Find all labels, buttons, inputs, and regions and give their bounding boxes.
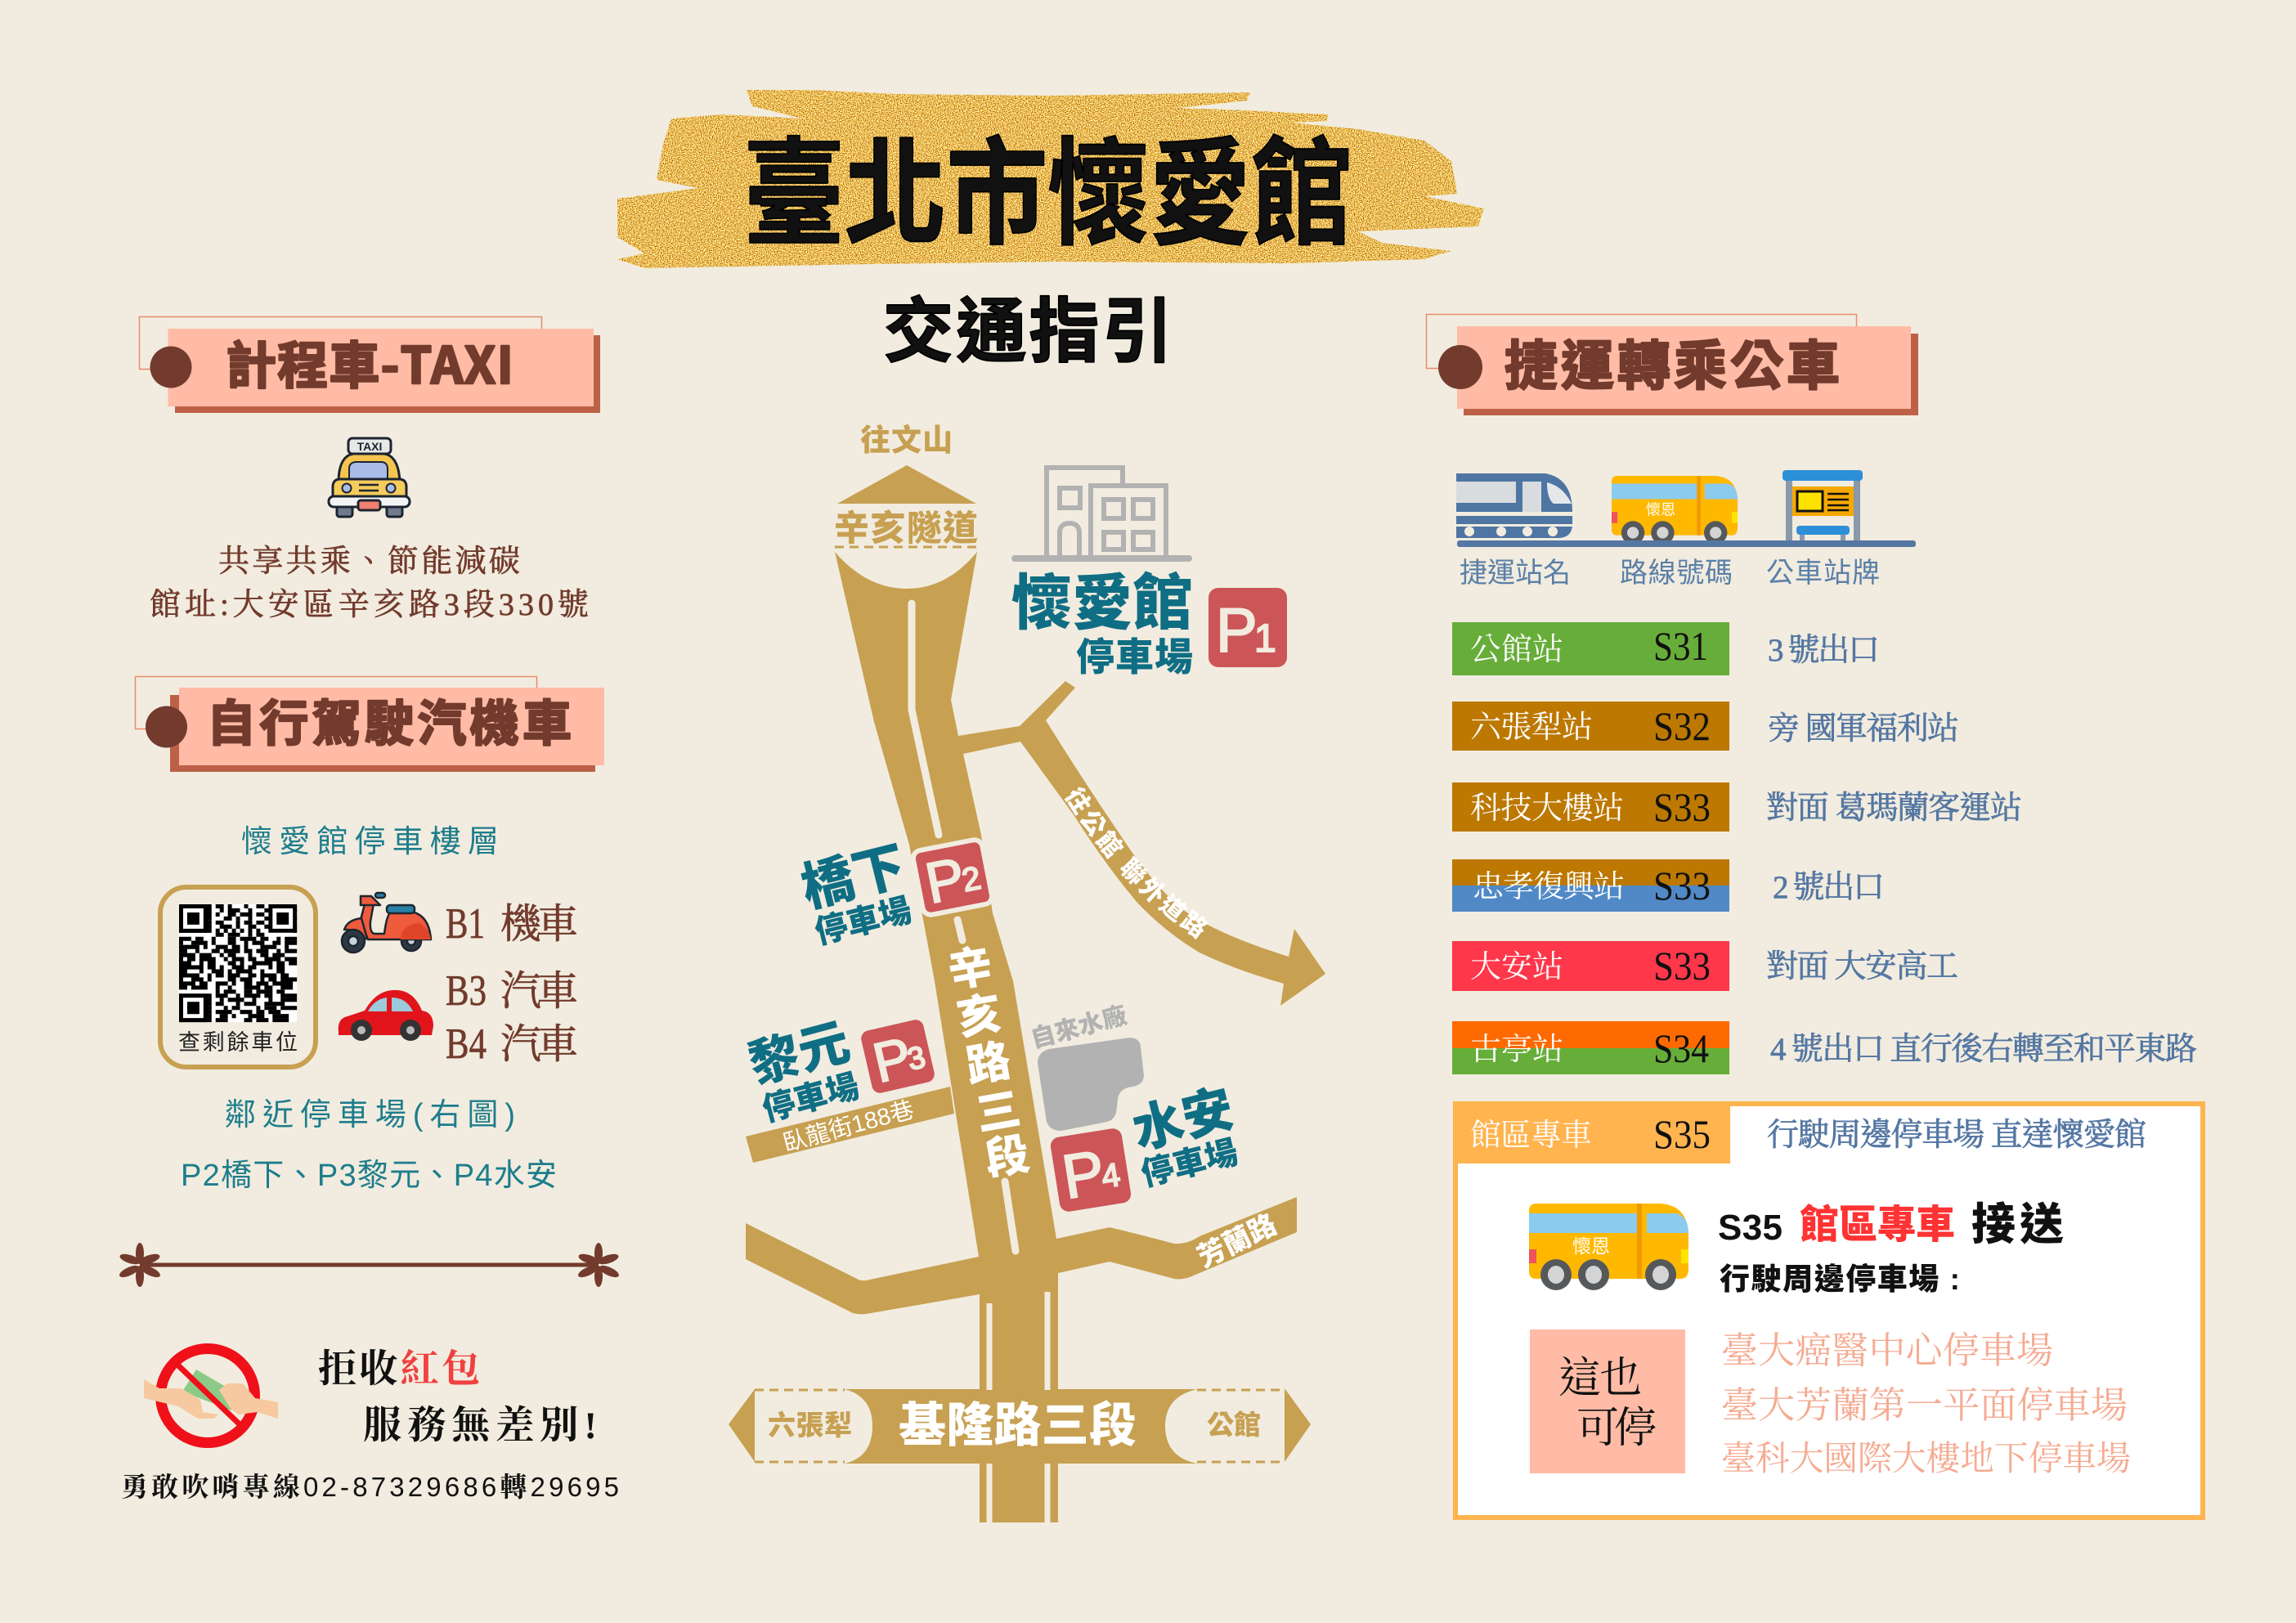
floor labels: 汽車 — [500, 1021, 578, 1067]
title block — [617, 90, 1484, 376]
icon: car — [339, 990, 433, 1041]
icon: bus stop — [1783, 470, 1863, 543]
road labels: 基隆路三段 — [899, 1399, 1137, 1452]
floor labels: B4 — [446, 1020, 487, 1068]
taxi text: 共享共乘、節能減碳 — [218, 545, 520, 579]
parking label: P1: 停車場 — [1076, 635, 1193, 679]
shuttle heading: S35 — [1718, 1208, 1783, 1248]
road labels: 段 — [981, 1129, 1034, 1186]
heading: taxi: 計程車-TAXI — [226, 325, 513, 398]
column labels — [1460, 558, 1880, 589]
icon: building — [1015, 468, 1189, 558]
row: Technology Building: 科技大樓站 — [1470, 791, 1624, 826]
row: Daan: S33 — [1653, 943, 1711, 989]
row: Liuzhangli: 六張犁站 — [1470, 711, 1593, 745]
panel: taxi — [139, 317, 600, 622]
row: Liuzhangli: 旁 國軍福利站 — [1768, 711, 1959, 746]
parking lot list: 臺大芳蘭第一平面停車場 — [1721, 1385, 2128, 1426]
column labels: 捷運站名 — [1460, 558, 1571, 589]
heading: self driving: 自行駕駛汽機車 — [207, 684, 572, 755]
row: Gongguan: 公館站 — [1470, 633, 1563, 667]
panel: S35 shuttle — [1453, 1101, 2203, 1518]
row: Gongguan — [1452, 622, 1880, 675]
parking label: P2: P — [921, 845, 970, 916]
floor labels: B3 — [446, 967, 487, 1015]
row: Guting: S34 — [1653, 1025, 1709, 1071]
road labels: 臥龍街188巷 — [780, 1096, 917, 1157]
shuttle heading: 館區專車 — [1800, 1203, 1955, 1247]
also parking box: 這也 — [1558, 1356, 1642, 1402]
icon: no bribery — [144, 1349, 278, 1442]
shuttle header row: 館區專車 — [1470, 1119, 1592, 1153]
row: Technology Building: 對面 葛瑪蘭客運站 — [1766, 791, 2022, 826]
nearby parking text: P2橋下、P3黎元、P4水安 — [181, 1159, 557, 1193]
floor labels: 機車 — [500, 901, 578, 947]
icon: train — [1456, 473, 1572, 538]
road: main roads — [729, 552, 1325, 1522]
parking label: P1: P — [1216, 596, 1258, 666]
parking label: P4 and water plant — [1028, 1001, 1241, 1213]
whistleblower hotline: 勇敢吹哨專線02-87329686轉29695 — [121, 1472, 619, 1503]
road labels: 亥 — [953, 989, 1006, 1045]
parking label: P2: 2 — [959, 860, 984, 899]
parking label: P4 and water plant: 停車場 — [1137, 1135, 1241, 1193]
road labels — [768, 787, 1281, 1452]
heading: taxi — [139, 317, 600, 413]
icon: taxi — [329, 438, 410, 517]
heading: MRT transfer: 捷運轉乘公車 — [1505, 323, 1840, 400]
road labels: 公館 — [1207, 1410, 1261, 1440]
shuttle header row — [1453, 1101, 2146, 1163]
road labels: 六張犁 — [768, 1410, 852, 1441]
floor labels — [446, 900, 578, 1068]
parking label: P1: 1 — [1254, 617, 1276, 661]
row: Zhongxiao Fuxing: 2 號出口 — [1773, 870, 1885, 905]
slogan — [318, 1348, 597, 1447]
slogan: 服務無差別! — [363, 1405, 597, 1447]
icon: bus: 懷恩 — [1646, 501, 1675, 518]
map — [729, 423, 1325, 1522]
road labels: 路 — [962, 1036, 1015, 1092]
QR code card — [160, 887, 316, 1067]
icon: scooter — [342, 893, 431, 953]
row: Daan — [1452, 941, 1958, 991]
parking label: P1: 懷愛館 — [1011, 569, 1193, 637]
parking label: P2 — [796, 836, 993, 951]
title: 臺北市懷愛館 — [743, 101, 1352, 269]
row: Zhongxiao Fuxing: 忠孝復興站 — [1473, 870, 1625, 904]
parking label: P1 — [1011, 569, 1287, 679]
parking label: P4 and water plant: 水安 — [1128, 1081, 1240, 1160]
road labels: 往公館 聯外道路 — [1065, 787, 1209, 939]
panel: no red envelopes — [121, 1348, 619, 1503]
parking label: P2: 停車場 — [811, 893, 915, 951]
shuttle header row: S35 — [1653, 1111, 1711, 1157]
parking floors heading: 懷愛館停車樓層 — [241, 825, 499, 859]
gold brush stroke — [617, 90, 1484, 268]
parking lot list: 臺大癌醫中心停車場 — [1721, 1330, 2053, 1371]
ground line — [1457, 540, 1916, 547]
parking label: P3 — [743, 1014, 936, 1128]
road labels: 三 — [972, 1084, 1025, 1141]
parking label: P4 and water plant: P — [1057, 1137, 1110, 1213]
row: Technology Building — [1452, 782, 2022, 832]
road labels: 辛 — [944, 941, 997, 998]
floor labels: B1 — [446, 900, 485, 948]
row: Gongguan: 3 號出口 — [1768, 633, 1880, 668]
parking label: P3: 黎元 — [743, 1014, 856, 1095]
row: Guting: 古亭站 — [1470, 1033, 1563, 1067]
parking label: P4 and water plant: 4 — [1099, 1157, 1123, 1195]
parking lot list — [1721, 1330, 2131, 1478]
row: Liuzhangli: S32 — [1653, 703, 1711, 749]
taxi text: 館址:大安區辛亥路3段330號 — [150, 588, 589, 622]
floor labels: 汽車 — [500, 968, 578, 1014]
shuttle heading: 行駛周邊停車場 : — [1720, 1262, 1960, 1296]
heading: MRT transfer — [1426, 314, 1918, 415]
shuttle header row: 行駛周邊停車場 直達懷愛館 — [1767, 1118, 2146, 1153]
row: Guting — [1452, 1021, 2197, 1074]
column labels: 公車站牌 — [1766, 558, 1880, 589]
slogan: 拒收紅包 — [318, 1348, 480, 1391]
panel: self driving — [136, 677, 604, 1193]
parking label: P3: P — [868, 1025, 917, 1095]
panel: MRT transfer bus — [1426, 314, 2203, 1518]
row: Technology Building: S33 — [1653, 784, 1711, 830]
road markings — [912, 603, 1047, 1522]
road labels: 芳蘭路 — [1193, 1209, 1281, 1274]
row: Daan: 對面 大安高工 — [1766, 949, 1958, 984]
subtitle: 交通指引 — [883, 274, 1173, 376]
icon: shuttle bus — [1529, 1204, 1688, 1290]
road: top destination arrow: 往文山 — [860, 423, 953, 457]
road: top destination arrow: 辛亥隧道 — [834, 509, 978, 549]
QR code card: 查剩餘車位 — [178, 1030, 298, 1055]
parking label: P3: 停車場 — [759, 1069, 863, 1128]
parking lot list: 臺科大國際大樓地下停車場 — [1721, 1440, 2131, 1478]
also parking box: 可停 — [1576, 1406, 1657, 1452]
heading: self driving — [136, 677, 604, 772]
parking label: P2: 橋下 — [796, 836, 911, 918]
icon: shuttle bus: 懷恩 — [1572, 1235, 1610, 1257]
also parking box — [1530, 1329, 1685, 1473]
road: top destination arrow — [834, 423, 978, 549]
shuttle heading: 接送 — [1971, 1200, 2064, 1249]
row: Zhongxiao Fuxing: S33 — [1653, 863, 1711, 908]
row: Liuzhangli — [1452, 702, 1959, 751]
nearby parking text: 鄰近停車場(右圖) — [225, 1098, 515, 1132]
row: Gongguan: S31 — [1653, 623, 1708, 669]
divider with asterisks — [118, 1243, 621, 1287]
nearby parking text — [181, 1098, 557, 1193]
parking label: P3: 3 — [904, 1040, 929, 1078]
shuttle heading — [1718, 1200, 2064, 1296]
row: Guting: 4 號出口 直行後右轉至和平東路 — [1770, 1032, 2197, 1067]
row: Daan: 大安站 — [1470, 950, 1563, 984]
taxi text — [150, 545, 589, 622]
icon: taxi: TAXI — [357, 440, 382, 453]
column labels: 路線號碼 — [1620, 558, 1733, 589]
row: Zhongxiao Fuxing — [1452, 859, 1885, 912]
parking label: P4 and water plant: 自來水廠 — [1028, 1001, 1130, 1053]
icon: bus — [1612, 476, 1738, 545]
